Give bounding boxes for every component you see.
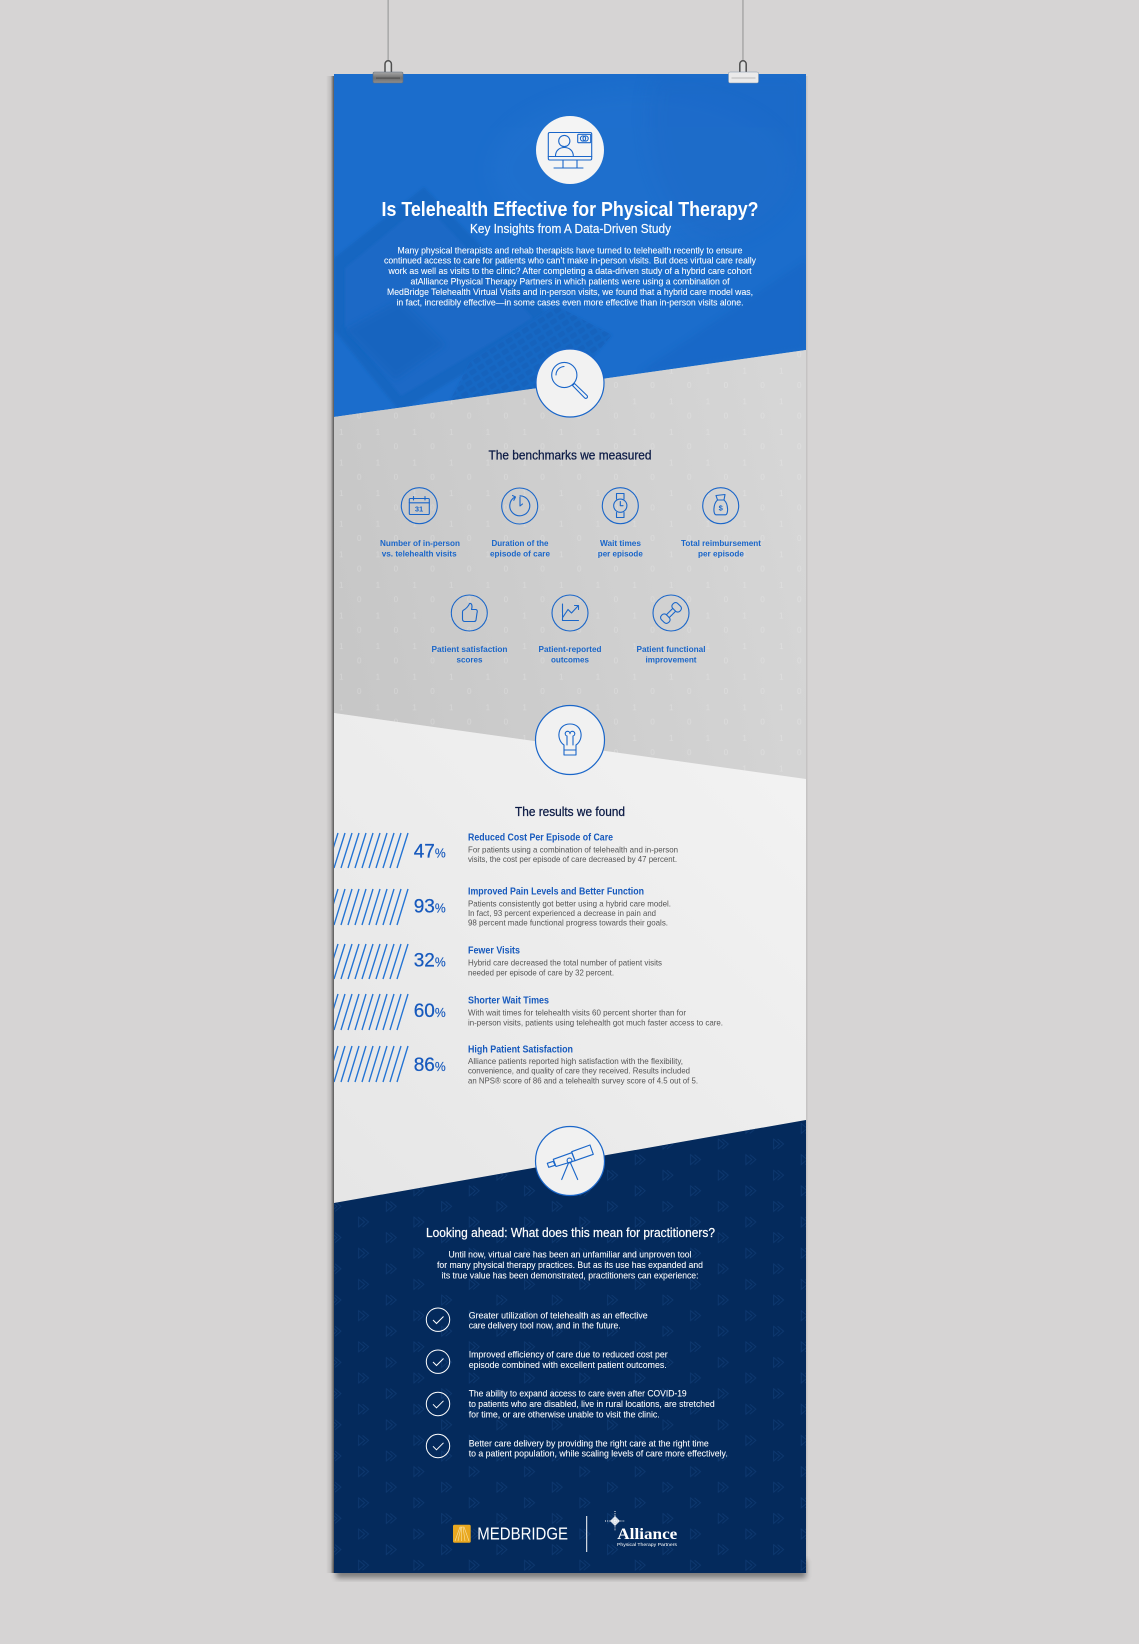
heading: results: The results we found xyxy=(515,805,625,819)
title: Is Telehealth Effective for Physical Therapy? xyxy=(382,198,758,221)
benchmark: patient satisfaction xyxy=(432,595,508,664)
result: 86 percent: Alliance patients reported high satisfaction with the flexibility, xyxy=(468,1056,683,1066)
result: 86 percent: convenience, and quality of care they received. Results included xyxy=(468,1066,690,1076)
benchmark: wait times: Wait times xyxy=(600,538,641,548)
intro paragraph xyxy=(384,244,756,307)
result: 47 percent xyxy=(327,833,678,868)
panel: grey benchmarks background xyxy=(334,350,806,779)
intro text xyxy=(437,1249,703,1281)
subtitle: Key Insights from A Data-Driven Study xyxy=(470,221,671,236)
checklist item 4: to a patient population, while scaling levels of care more effectively. xyxy=(469,1448,728,1459)
checklist item 4 xyxy=(426,1434,728,1459)
intro paragraph: Many physical therapists and rehab therapists have turned to telehealth recently to ensure xyxy=(398,244,742,255)
benchmark: total reimbursement: Total reimbursement xyxy=(681,538,761,548)
icon: light bulb xyxy=(536,706,604,774)
intro paragraph: continued access to care for patients who can’t make in-person visits. But does virtual care really xyxy=(384,255,756,266)
result: 47 percent: 47% xyxy=(414,841,446,863)
intro paragraph: MedBridge Telehealth Virtual Visits and in-person visits, we found that a hybrid care model was, xyxy=(387,286,753,297)
hanging wire and clip: right xyxy=(728,0,758,83)
intro text: for many physical therapy practices. But as its use has expanded and xyxy=(437,1259,703,1270)
logo: Alliance Physical Therapy Partners: Alliance xyxy=(617,1526,677,1543)
result: 47 percent: visits, the cost per episode of care decreased by 47 percent. xyxy=(468,854,677,864)
result: 60 percent: in-person visits, patients using telehealth got much faster access to care. xyxy=(468,1017,723,1027)
benchmark: duration of episode xyxy=(490,488,550,559)
checklist item 3 xyxy=(426,1388,715,1420)
result: 93 percent: Improved Pain Levels and Better Function xyxy=(468,887,644,898)
benchmark: total reimbursement: $ xyxy=(719,504,724,512)
logo: MedBridge xyxy=(453,1523,568,1543)
benchmark: functional improvement: Patient functional xyxy=(636,644,706,654)
result: 93 percent: 93% xyxy=(414,896,446,918)
intro text: Until now, virtual care has been an unfamiliar and unproven tool xyxy=(448,1249,692,1260)
poster drop shadow xyxy=(326,76,808,1578)
benchmark: total reimbursement: per episode xyxy=(698,549,744,559)
benchmark: in-person vs telehealth visits xyxy=(380,488,460,559)
benchmark: wait times xyxy=(598,488,643,559)
icon: telehealth monitor xyxy=(536,116,604,184)
benchmark: in-person vs telehealth visits: vs. telehealth visits xyxy=(382,549,457,559)
intro paragraph: in fact, incredibly effective—in some cases even more effective than in-person visits alone. xyxy=(396,296,744,307)
result: 32 percent xyxy=(327,944,662,979)
panel: navy looking ahead background xyxy=(334,1120,806,1573)
result: 47 percent: For patients using a combination of telehealth and in-person xyxy=(468,844,678,854)
result: 32 percent: needed per episode of care by 32 percent. xyxy=(468,967,614,977)
intro paragraph: work as well as visits to the clinic? After completing a data-driven study of a hybrid care cohort xyxy=(388,265,752,276)
result: 60 percent xyxy=(327,994,723,1030)
benchmark: functional improvement xyxy=(636,595,706,664)
heading: looking ahead: Looking ahead: What does this mean for practitioners? xyxy=(426,1226,715,1240)
result: 93 percent: 98 percent made functional progress towards their goals. xyxy=(468,917,668,927)
result: 47 percent: Reduced Cost Per Episode of Care xyxy=(468,833,613,844)
result: 60 percent: Shorter Wait Times xyxy=(468,996,549,1007)
checklist item 1 xyxy=(426,1308,648,1331)
result: 32 percent: Hybrid care decreased the total number of patient visits xyxy=(468,958,662,968)
checklist item 1: care delivery tool now, and in the future. xyxy=(469,1320,621,1331)
result: 93 percent: Patients consistently got better using a hybrid care model. xyxy=(468,898,671,908)
panel: blue intro background xyxy=(334,74,806,420)
result: 32 percent: Fewer Visits xyxy=(468,946,521,957)
checklist item 3: to patients who are disabled, live in rural locations, are stretched xyxy=(469,1398,715,1409)
result: 86 percent xyxy=(327,1044,698,1085)
stripes xyxy=(327,1046,408,1082)
checklist item 2 xyxy=(426,1349,668,1373)
benchmark: patient-reported outcomes xyxy=(538,595,602,664)
result: 86 percent: an NPS® score of 86 and a telehealth survey score of 4.5 out of 5. xyxy=(468,1075,698,1085)
logo: Alliance Physical Therapy Partners xyxy=(605,1511,677,1547)
benchmark: patient satisfaction: scores xyxy=(456,654,483,664)
benchmark: patient-reported outcomes: outcomes xyxy=(551,654,589,664)
intro text: its true value has been demonstrated, practitioners can experience: xyxy=(442,1270,698,1281)
result: 60 percent: 60% xyxy=(414,1000,446,1022)
stripes xyxy=(327,889,408,925)
stripes xyxy=(327,944,408,979)
benchmark: functional improvement: improvement xyxy=(646,654,697,664)
benchmark: patient-reported outcomes: Patient-reported xyxy=(538,644,602,654)
benchmark: patient satisfaction: Patient satisfaction xyxy=(432,644,508,654)
checklist item 2: Improved efficiency of care due to reduced cost per xyxy=(469,1349,668,1360)
result: 93 percent: In fact, 93 percent experienced a decrease in pain and xyxy=(468,908,656,918)
stripes xyxy=(327,833,408,868)
result: 32 percent: 32% xyxy=(414,950,446,972)
heading: benchmarks: The benchmarks we measured xyxy=(488,448,652,462)
result: 93 percent xyxy=(327,887,671,927)
logo: Alliance Physical Therapy Partners: Physical Therapy Partners xyxy=(617,1542,677,1547)
logo: MedBridge: MEDBRIDGE xyxy=(477,1523,568,1543)
hanging wire and clip: left xyxy=(373,0,403,83)
benchmark: duration of episode: Duration of the xyxy=(492,538,549,548)
benchmark: duration of episode: episode of care xyxy=(490,549,550,559)
checklist item 2: episode combined with excellent patient outcomes. xyxy=(469,1359,667,1370)
icon: telescope xyxy=(536,1126,604,1196)
intro paragraph: atAlliance Physical Therapy Partners in which patients were using a combination of xyxy=(410,275,730,286)
benchmark: total reimbursement xyxy=(681,488,761,559)
title block xyxy=(382,198,758,307)
result: 86 percent: High Patient Satisfaction xyxy=(468,1044,573,1055)
panel: white results background xyxy=(334,713,806,1203)
checklist item 3: for time, or are otherwise unable to visit the clinic. xyxy=(469,1409,660,1420)
benchmark: in-person vs telehealth visits: Number of in-person xyxy=(380,538,460,548)
checklist item 3: The ability to expand access to care even after COVID-19 xyxy=(469,1388,687,1399)
looking ahead block xyxy=(426,1226,715,1281)
benchmark: wait times: per episode xyxy=(598,549,643,559)
icon: magnifier xyxy=(536,349,604,417)
checklist item 1: Greater utilization of telehealth as an effective xyxy=(469,1309,648,1320)
checklist item 4: Better care delivery by providing the right care at the right time xyxy=(469,1437,709,1448)
result: 86 percent: 86% xyxy=(414,1054,446,1076)
benchmark: in-person vs telehealth visits: 31 xyxy=(415,505,423,514)
result: 60 percent: With wait times for telehealth visits 60 percent shorter than for xyxy=(468,1008,686,1018)
stripes xyxy=(327,994,408,1030)
logo divider xyxy=(586,1516,587,1552)
